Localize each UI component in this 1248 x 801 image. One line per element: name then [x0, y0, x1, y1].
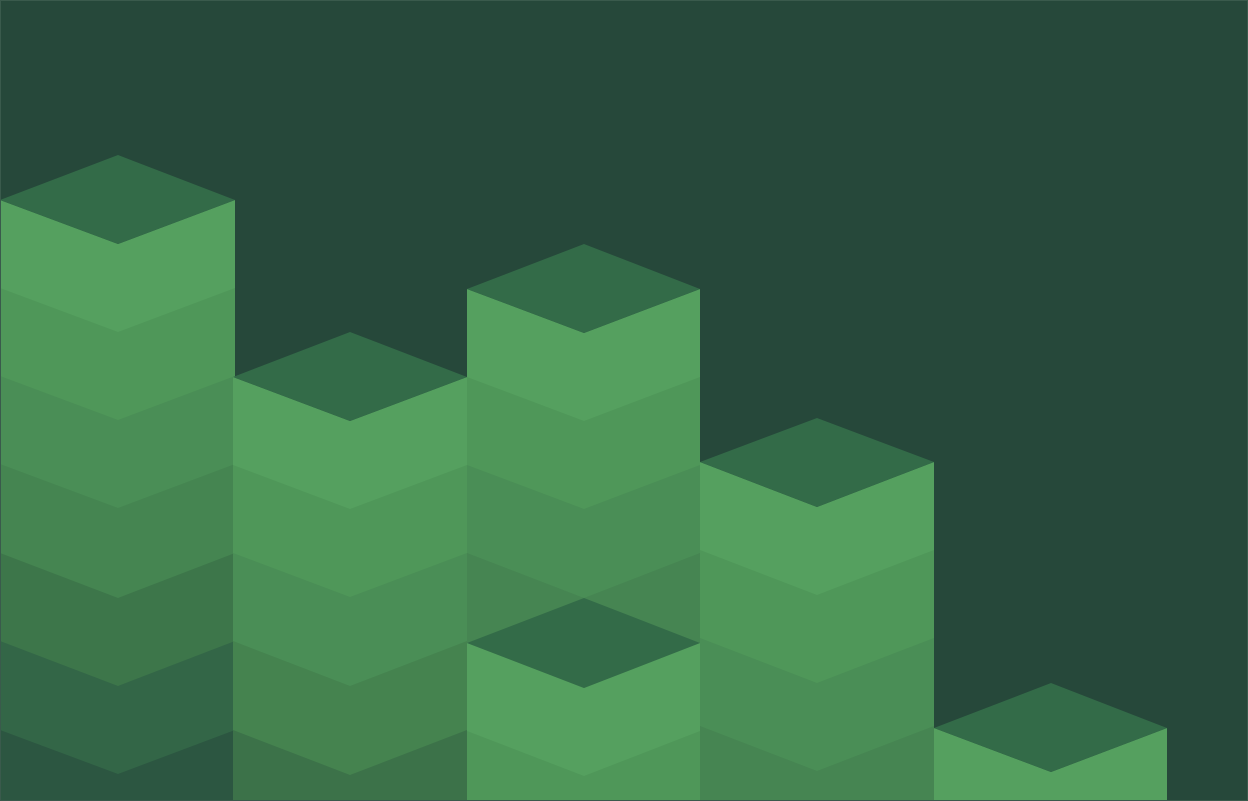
column 1 — [0, 155, 235, 801]
column 4 — [700, 418, 934, 801]
column 2 — [233, 332, 467, 801]
column 5 — [934, 683, 1167, 801]
column 3 — [467, 244, 700, 801]
